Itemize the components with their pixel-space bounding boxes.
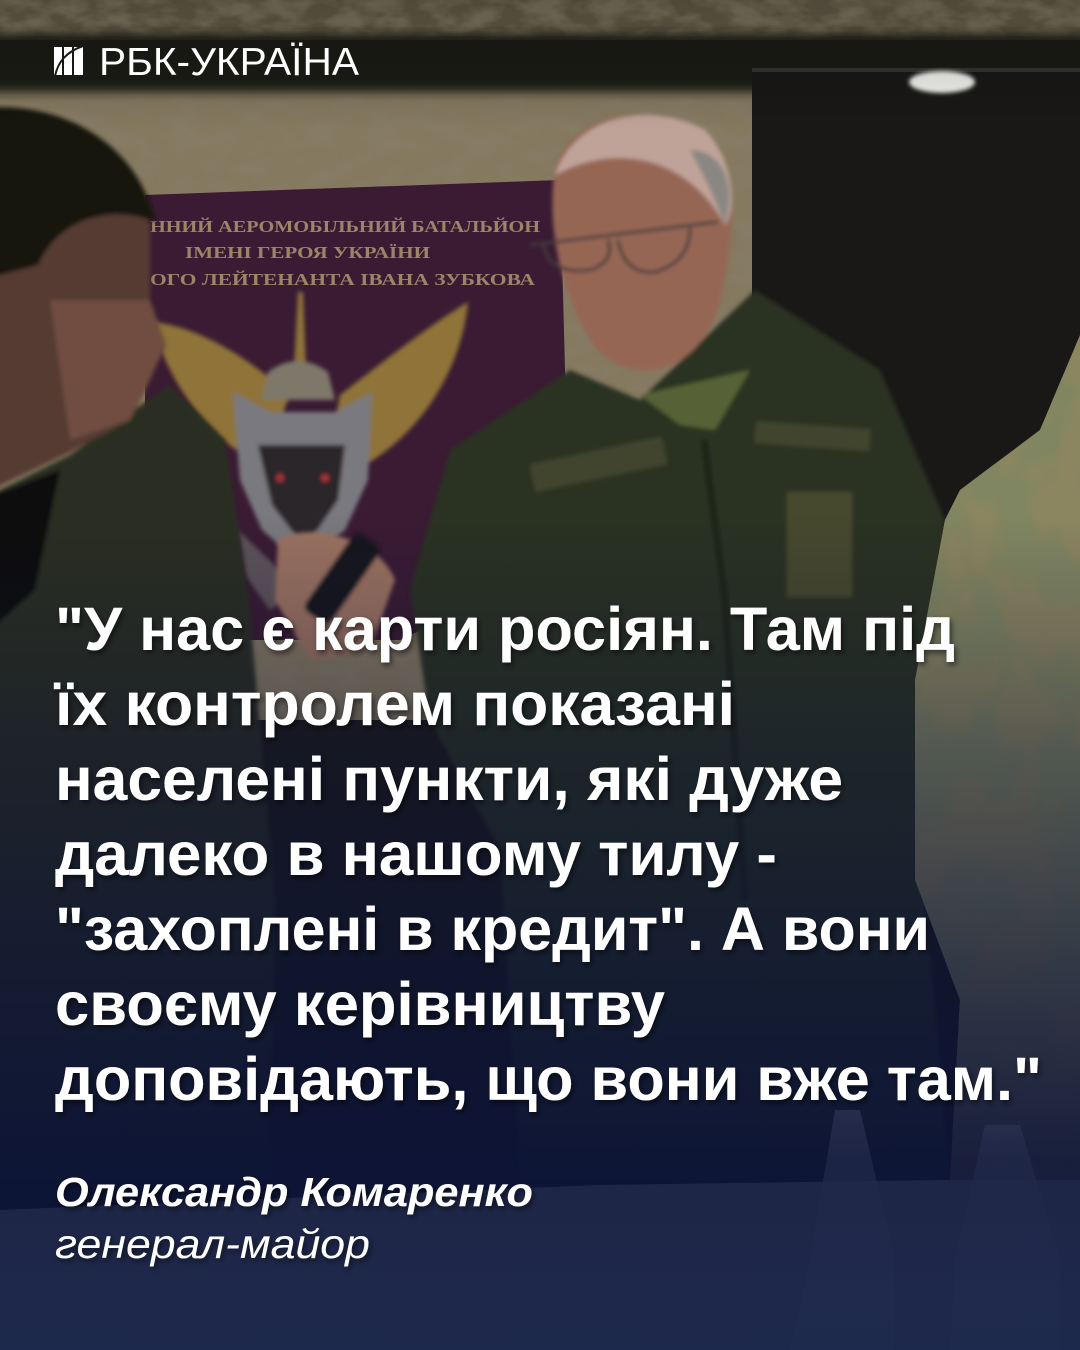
- quote: населені пункти, які дуже: [55, 745, 843, 813]
- emblem: wings and wolf: [152, 292, 468, 610]
- quote: їх контролем показані: [53, 670, 735, 738]
- quote: [53, 595, 1042, 1113]
- purple banner: [145, 180, 570, 640]
- quote: "У нас є карти росіян. Там під: [55, 595, 955, 663]
- quote: своєму керівництву: [55, 970, 665, 1038]
- quote: "захоплені в кредит". А вони: [55, 895, 930, 963]
- man on the right in camouflage: [915, 335, 1080, 1180]
- speaker name: Олександр Комаренко: [55, 1169, 533, 1215]
- ceiling band: [0, 0, 1080, 92]
- dark screen on the right: [752, 68, 1080, 728]
- quote: доповідають, що вони вже там.": [55, 1045, 1042, 1113]
- icon: logo mark: [54, 46, 83, 76]
- purple banner: ННИЙ АЕРОМОБІЛЬНИЙ БАТАЛЬЙОН: [150, 217, 540, 236]
- purple banner: ІМЕНІ ГЕРОЯ УКРАЇНИ: [185, 243, 430, 262]
- camouflage wall: [0, 80, 760, 720]
- top shade: [0, 0, 1080, 130]
- man on the left: [0, 107, 275, 1180]
- quote: далеко в нашому тилу -: [55, 820, 777, 888]
- man in the centre: [275, 115, 950, 1180]
- attribution: [55, 1169, 533, 1267]
- table with bottles: [0, 1110, 1080, 1350]
- logo: РБК-Україна: [54, 41, 359, 84]
- speaker title: генерал-майор: [55, 1221, 370, 1267]
- logo wordmark: РБК-УКРАЇНА: [99, 41, 359, 84]
- purple banner: ОГО ЛЕЙТЕНАНТА ІВАНА ЗУБКОВА: [150, 270, 536, 289]
